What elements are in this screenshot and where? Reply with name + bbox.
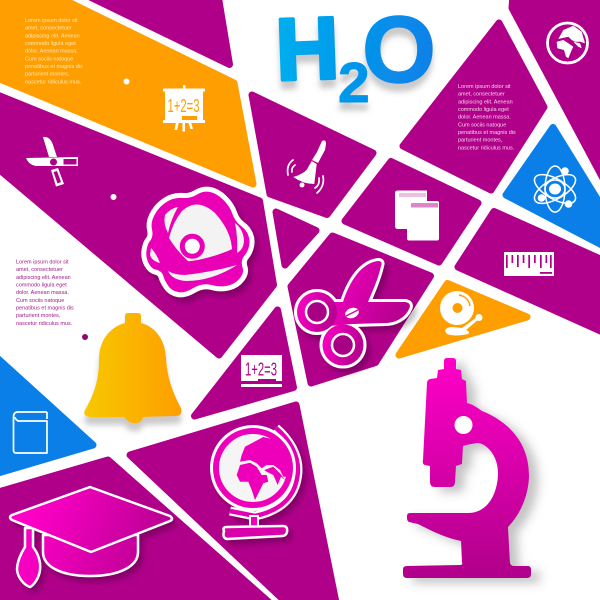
panel: small centre triangle <box>276 212 316 265</box>
panel: scissors panel <box>291 236 430 383</box>
text block: orange band: commodo ligula eget <box>25 41 76 47</box>
icon: alarm bell <box>440 291 482 336</box>
icon: book outline <box>14 412 47 453</box>
sticker: yellow bell <box>84 313 181 423</box>
text block: orange band: amet, consectetuer <box>25 26 72 32</box>
icon: small chalkboard <box>241 355 282 387</box>
icon: books <box>395 190 439 240</box>
dot: purple band <box>110 194 116 200</box>
sticker: graduation cap <box>10 487 172 587</box>
title: H2O: O <box>362 0 436 103</box>
icon: small chalkboard: 1+2=3 <box>245 360 277 380</box>
text block: orange band: dolor. Aenean massa. <box>25 49 78 55</box>
panel: blue atom triangle <box>506 128 600 247</box>
text block: orange band: nascetur ridiculus mus. <box>25 79 82 85</box>
panel: chalkboard panel <box>194 310 294 416</box>
sticker: scissors <box>297 261 410 366</box>
text block: orange band: penatibus et magnis dis <box>25 64 83 70</box>
title: H2O: H <box>274 0 341 99</box>
text block: top-right panel: commodo ligula eget <box>458 107 509 113</box>
text block: orange band: parturient montes, <box>25 72 70 78</box>
panel: cap panel <box>0 460 272 600</box>
icon: globe white <box>548 23 588 63</box>
icon: ruler <box>504 252 554 276</box>
text block: top-right panel: Cum sociis natoque <box>458 122 506 128</box>
icon: chalkboard with stand: 1+2=3 <box>168 96 200 116</box>
title: H2O <box>274 0 436 115</box>
panel: bell panel <box>252 95 373 214</box>
dot: orange band <box>124 78 130 84</box>
text block: orange band: Lorem ipsum dolor sit <box>25 18 78 24</box>
panel: books panel <box>345 162 478 262</box>
panel: globe panel <box>130 405 336 600</box>
text block: left: commodo ligula eget <box>16 282 67 288</box>
icon: chalkboard with stand <box>163 85 205 132</box>
panel: top-right text panel <box>403 23 544 190</box>
dot: left dark <box>82 334 88 340</box>
sticker: microscope <box>403 358 531 578</box>
sticker: desk globe <box>210 425 298 539</box>
text block: orange band: adipiscing elit. Aenean <box>25 33 80 39</box>
text block: top-right panel: dolor. Aenean massa. <box>458 115 511 121</box>
text block: top-right panel: nascetur ridiculus mus. <box>458 145 515 151</box>
panel: orange alarm triangle <box>399 284 527 355</box>
text block: top-right panel: adipiscing elit. Aenean <box>458 99 513 105</box>
panel: orange text band <box>0 0 253 184</box>
panel: top purple wedge <box>86 0 230 64</box>
panel: blue book triangle <box>0 356 93 474</box>
text block: left: Cum sociis natoque <box>16 298 64 304</box>
text block: top-right panel: Lorem ipsum dolor sit <box>458 84 511 90</box>
text block: left: parturient montes, <box>16 313 61 319</box>
text block: left: dolor. Aenean massa. <box>16 290 69 296</box>
text block: left: Lorem ipsum dolor sit <box>16 260 69 266</box>
icon: handbell <box>288 140 326 193</box>
icon: small scissors <box>26 137 78 186</box>
text block: left: amet, consectetuer <box>16 267 63 273</box>
icon: atom white <box>530 166 580 212</box>
text block: top-right panel: parturient montes, <box>458 138 503 144</box>
sticker: atom <box>144 189 252 295</box>
panel: ruler panel <box>458 212 600 333</box>
panel: large purple band <box>0 94 274 355</box>
text block: top-right panel: penatibus et magnis dis <box>458 130 516 136</box>
text block: orange band: Cum sociis natoque <box>25 56 73 62</box>
text block: top-right panel: amet, consectetuer <box>458 92 505 98</box>
panel: top-right corner <box>512 0 600 182</box>
title: H2O: 2 <box>338 51 370 115</box>
text block: left: adipiscing elit. Aenean <box>16 275 71 281</box>
text block: left: nascetur ridiculus mus. <box>16 321 73 327</box>
text block: left: penatibus et magnis dis <box>16 306 74 312</box>
